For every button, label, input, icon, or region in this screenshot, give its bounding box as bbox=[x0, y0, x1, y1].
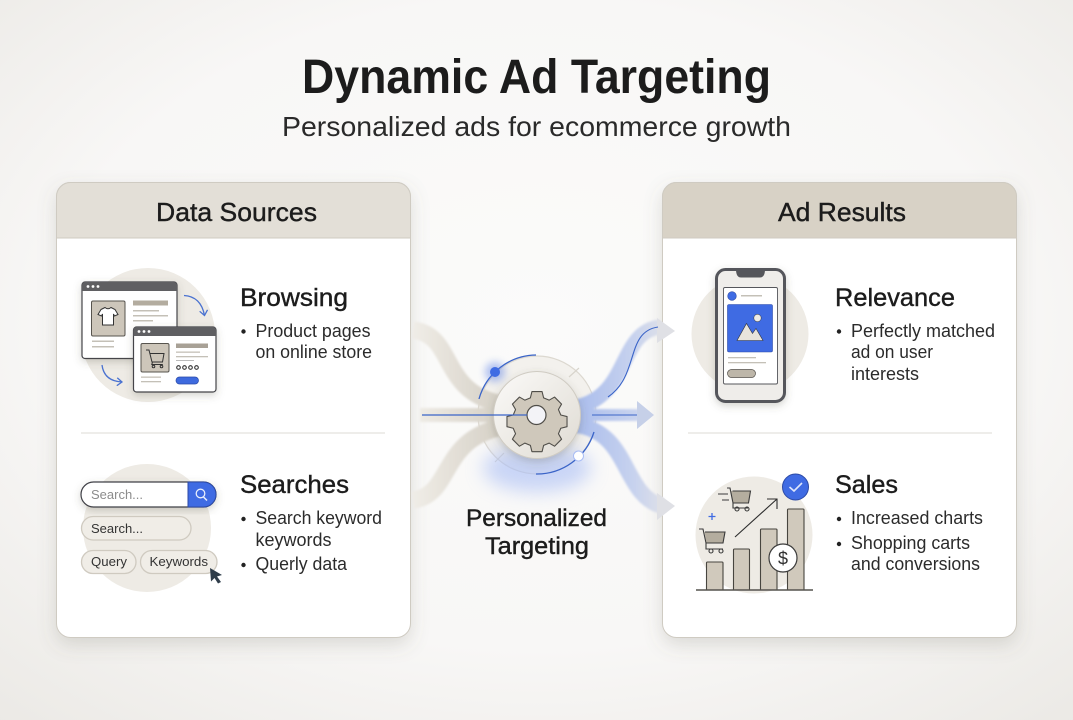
icon: sales chart bbox=[696, 474, 813, 594]
text: searches: Searches bbox=[240, 471, 349, 499]
text: browsing: on online store bbox=[256, 342, 372, 362]
title: Dynamic Ad Targeting bbox=[302, 51, 771, 104]
arrow: to relevance bbox=[657, 318, 675, 343]
text: sales: and conversions bbox=[851, 554, 980, 574]
heading: ad results: Ad Results bbox=[778, 197, 906, 227]
text: searches bbox=[240, 471, 382, 574]
text: sales: Sales bbox=[835, 471, 898, 499]
label: personalized targeting: Targeting bbox=[485, 533, 589, 560]
icon: search bars: Search... bbox=[91, 488, 143, 502]
panel: data sources bbox=[56, 182, 410, 638]
flow: incoming data streams bbox=[413, 330, 498, 500]
text: relevance: ad on user bbox=[851, 342, 933, 362]
icon: browsing windows bbox=[81, 268, 216, 402]
ring: targeting hub background bbox=[478, 356, 596, 492]
text: browsing: Browsing bbox=[240, 284, 348, 312]
arrow: forward bbox=[637, 401, 654, 429]
icon: sales chart: $ bbox=[778, 548, 788, 568]
flow: outgoing personalized streams bbox=[576, 318, 675, 520]
text: relevance: Relevance bbox=[835, 284, 955, 312]
text: sales bbox=[835, 471, 983, 574]
text: searches: Search keyword bbox=[256, 508, 382, 528]
text: searches: keywords bbox=[256, 530, 332, 550]
label: personalized targeting bbox=[466, 505, 607, 560]
arrow: to sales bbox=[657, 493, 675, 520]
subtitle: Personalized ads for ecommerce growth bbox=[282, 111, 791, 142]
icon: search bars: Query bbox=[91, 555, 128, 569]
text: sales: Shopping carts bbox=[851, 533, 970, 553]
text: relevance bbox=[835, 284, 995, 384]
icon: search bars: Keywords bbox=[150, 555, 208, 569]
text: browsing: Product pages bbox=[256, 321, 370, 341]
text: relevance: interests bbox=[851, 364, 919, 384]
text: searches: Querly data bbox=[256, 554, 348, 574]
icon: phone with ad bbox=[692, 270, 808, 402]
heading: data sources: Data Sources bbox=[156, 197, 317, 227]
panel: ad results bbox=[662, 182, 1016, 638]
text: browsing bbox=[240, 284, 372, 362]
icon: gear bbox=[507, 392, 567, 452]
icon: search bars bbox=[81, 464, 222, 592]
icon: targeting gear hub bbox=[422, 355, 594, 474]
icon: search bars: Search... bbox=[91, 522, 143, 536]
text: relevance: Perfectly matched bbox=[851, 321, 995, 341]
text: sales: Increased charts bbox=[851, 508, 983, 528]
label: personalized targeting: Personalized bbox=[466, 505, 607, 532]
